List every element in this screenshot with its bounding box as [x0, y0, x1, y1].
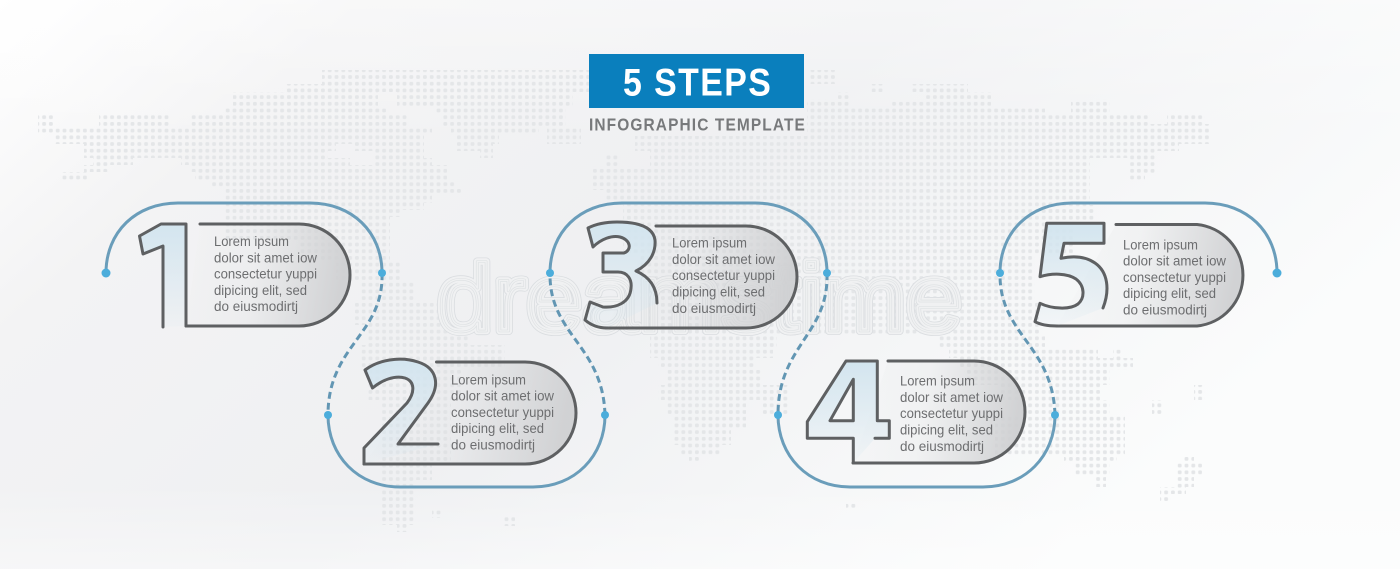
step 3 text: consectetur yuppi: [672, 267, 775, 283]
step 4 text: dolor sit amet iow: [900, 389, 1004, 405]
step 1 pill: [186, 224, 350, 326]
step 5 numeral: [1035, 223, 1107, 326]
step 5: [1035, 223, 1243, 326]
watermark: dreamstime: [437, 245, 962, 352]
step 3 numeral: [585, 222, 657, 328]
step 4 text: [900, 373, 1004, 454]
step 3 text: dipicing elit, sed: [672, 284, 765, 300]
title banner: [589, 54, 804, 108]
dotted world map: [38, 70, 1209, 532]
step 1 text: do eiusmodirtj: [214, 298, 298, 314]
step 5 text: Lorem ipsum: [1123, 236, 1198, 252]
step 3 text: dolor sit amet iow: [672, 251, 776, 267]
step 3 text: do eiusmodirtj: [672, 300, 756, 316]
step 3: [585, 222, 797, 328]
step 4 text: dipicing elit, sed: [900, 422, 993, 438]
step 1 text: consectetur yuppi: [214, 266, 317, 282]
connector nodes: [102, 268, 1282, 419]
step 2 text: do eiusmodirtj: [451, 436, 535, 452]
subtitle: INFOGRAPHIC TEMPLATE: [589, 115, 805, 135]
step 5 text: dipicing elit, sed: [1123, 285, 1216, 301]
step 4 numeral: [807, 361, 889, 463]
step 4 pill: [853, 361, 1025, 463]
step 1: [140, 224, 350, 327]
step 5 text: consectetur yuppi: [1123, 269, 1226, 285]
step 2 text: Lorem ipsum: [451, 371, 526, 387]
step 2 pill: [364, 362, 576, 464]
step 2 text: dolor sit amet iow: [451, 388, 555, 404]
step 1 text: Lorem ipsum: [214, 233, 289, 249]
step 3 text: [672, 235, 776, 316]
step 3 pill: [606, 226, 797, 328]
step 4 text: do eiusmodirtj: [900, 438, 984, 454]
step 1 text: [214, 233, 318, 314]
watermark: dreamstime: [437, 245, 962, 352]
connector line: [106, 203, 1277, 487]
step 1 text: dipicing elit, sed: [214, 282, 307, 298]
step 2 text: dipicing elit, sed: [451, 420, 544, 436]
step 4 text: consectetur yuppi: [900, 405, 1003, 421]
step 1 text: dolor sit amet iow: [214, 249, 318, 265]
step 5 pill: [1057, 224, 1243, 326]
step 1 numeral: [140, 224, 186, 327]
step 4: [807, 361, 1025, 463]
step 4 text: Lorem ipsum: [900, 373, 975, 389]
step 2 text: consectetur yuppi: [451, 404, 554, 420]
watermark: dreamstime: [437, 245, 962, 352]
step 5 text: dolor sit amet iow: [1123, 253, 1227, 269]
step 3 text: Lorem ipsum: [672, 235, 747, 251]
step 5 text: [1123, 236, 1227, 318]
step 2 numeral: [364, 359, 438, 464]
title banner: 5 STEPS: [623, 61, 771, 104]
step 2: [364, 359, 576, 464]
step 2 text: [451, 371, 555, 452]
watermark: dreamstime: [437, 245, 962, 352]
step 5 text: do eiusmodirtj: [1123, 302, 1207, 318]
